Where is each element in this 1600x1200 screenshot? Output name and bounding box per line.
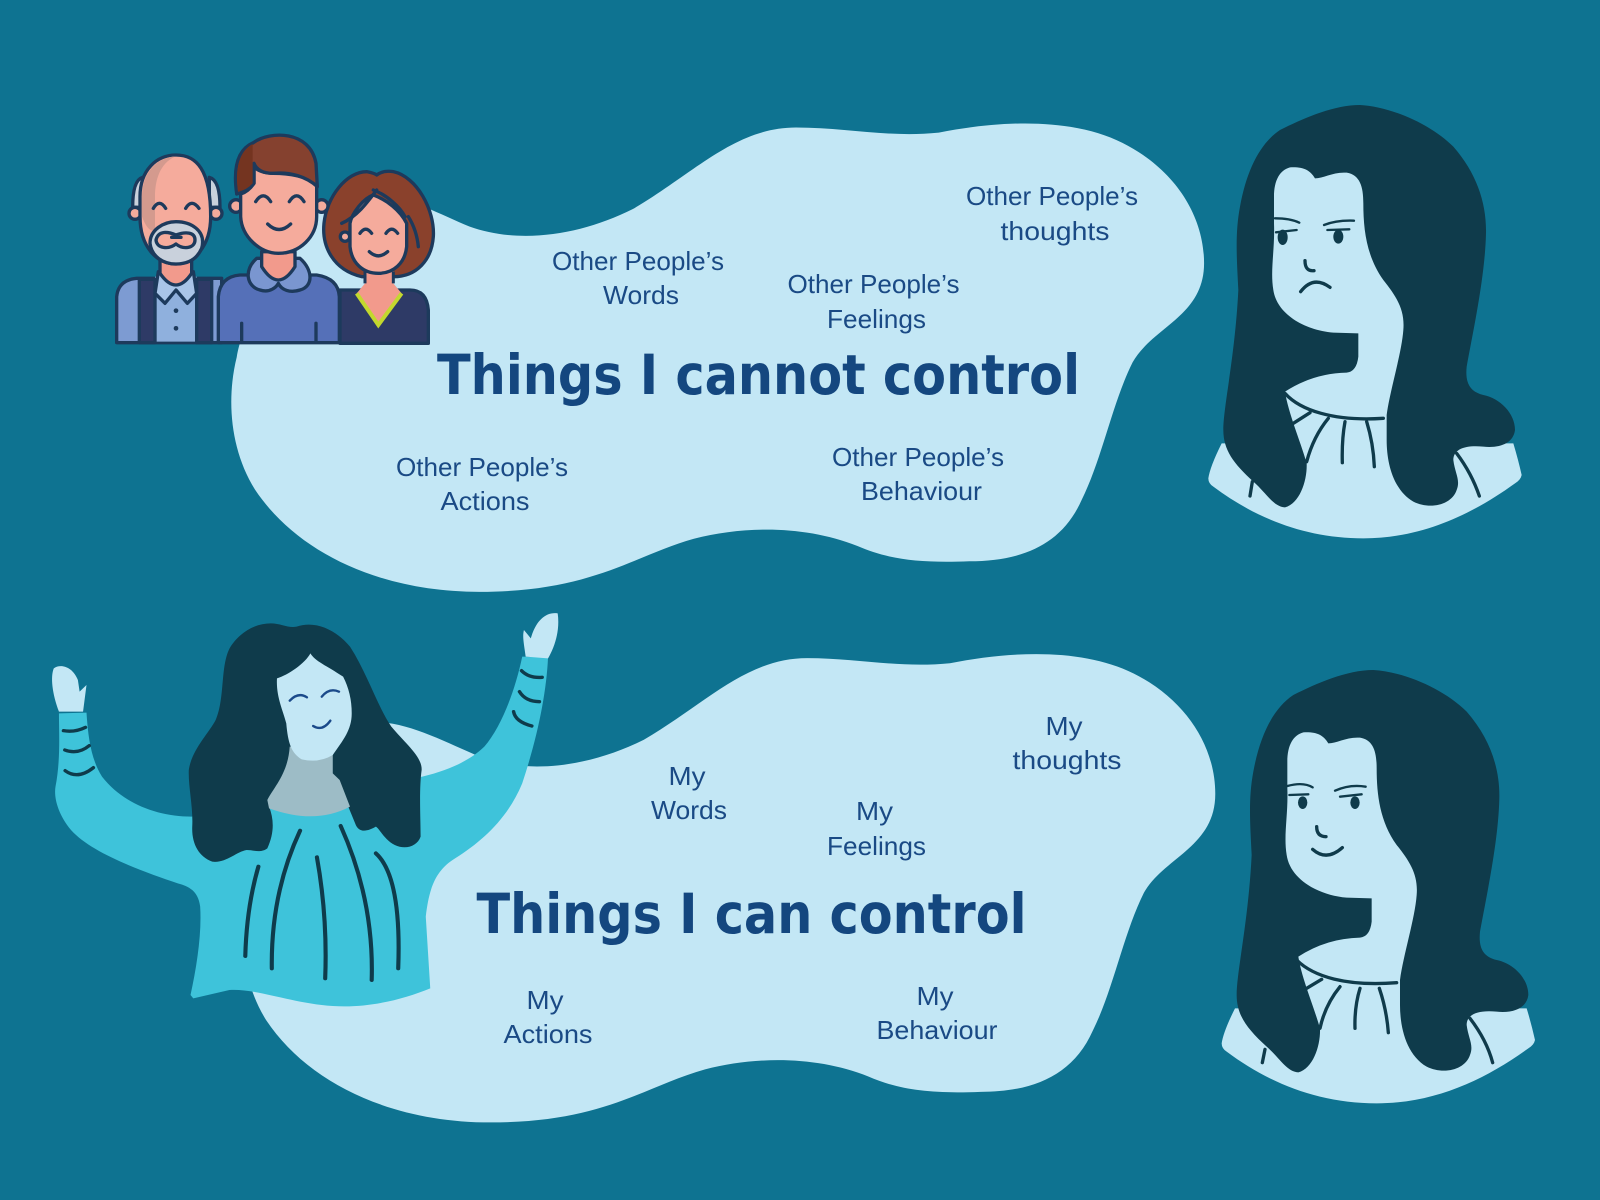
older man with beard (117, 155, 222, 343)
text: other people's feelings: Feelings (827, 304, 926, 334)
text: other people's feelings: Other People’s (788, 269, 960, 299)
text: other people's actions: Other People’s (396, 452, 568, 482)
smile and closed eyes (290, 690, 339, 728)
text: my behaviour: Behaviour (876, 1015, 998, 1045)
illustration: frowning woman with long hair (1208, 105, 1522, 538)
text: other people's words (552, 246, 724, 310)
cuff lines (63, 671, 542, 775)
left hand (52, 666, 86, 712)
text: other people's thoughts (966, 181, 1138, 246)
icon: family of three people (117, 135, 433, 343)
illustration: smiling woman with long hair (1222, 670, 1535, 1103)
younger man in the centre (218, 135, 339, 343)
text: my actions: My (526, 985, 564, 1015)
text: my thoughts (1012, 711, 1122, 775)
face (277, 653, 352, 761)
face and neck underlay (1268, 165, 1408, 458)
text: other people's behaviour (832, 442, 1004, 506)
panel: things I can control blob (242, 654, 1215, 1122)
text: my behaviour: My (916, 981, 954, 1011)
woman with short brown hair (324, 171, 433, 343)
text: other people's behaviour: Behaviour (861, 476, 982, 506)
text: my thoughts: thoughts (1012, 745, 1122, 775)
text: other people's feelings (788, 269, 960, 334)
text: my feelings: Feelings (827, 831, 926, 861)
text: my feelings: My (856, 796, 893, 826)
text: my words: My (668, 761, 706, 791)
right hand (523, 613, 558, 658)
text: other people's actions (396, 452, 568, 516)
text: my feelings (827, 796, 926, 861)
illustration: happy woman with raised arms (52, 613, 558, 1006)
face and neck underlay (1282, 730, 1422, 1023)
sweater fold lines (245, 826, 399, 980)
panel: things I cannot control blob (231, 123, 1204, 592)
text: other people's actions: Actions (440, 486, 530, 516)
heading: things I cannot control: Things I cannot control (437, 343, 1080, 407)
text: my thoughts: My (1046, 711, 1082, 741)
text: other people's behaviour: Other People’s (832, 442, 1004, 472)
shoulders (1208, 443, 1522, 538)
text: my actions: Actions (504, 1019, 592, 1049)
heading: things I can control: Things I can control (476, 882, 1026, 946)
text: other people's thoughts: thoughts (1000, 216, 1110, 246)
frowning face features (1275, 218, 1354, 292)
text: my words (651, 761, 727, 825)
text: other people's words: Other People’s (552, 246, 724, 276)
shoulders (1222, 1008, 1535, 1103)
text: my behaviour (876, 981, 998, 1045)
hair (189, 623, 422, 862)
neck (267, 747, 350, 816)
text: other people's words: Words (603, 280, 679, 310)
long dark hair (1223, 105, 1515, 507)
long dark hair (1237, 670, 1528, 1072)
text: my words: Words (651, 795, 727, 825)
text: my actions (504, 985, 592, 1049)
sweater (55, 657, 548, 1006)
text: other people's thoughts: Other People’s (966, 181, 1138, 211)
collar and sweater lines (1250, 393, 1479, 496)
smiling face features (1287, 784, 1366, 855)
collar and sweater lines (1262, 960, 1493, 1063)
